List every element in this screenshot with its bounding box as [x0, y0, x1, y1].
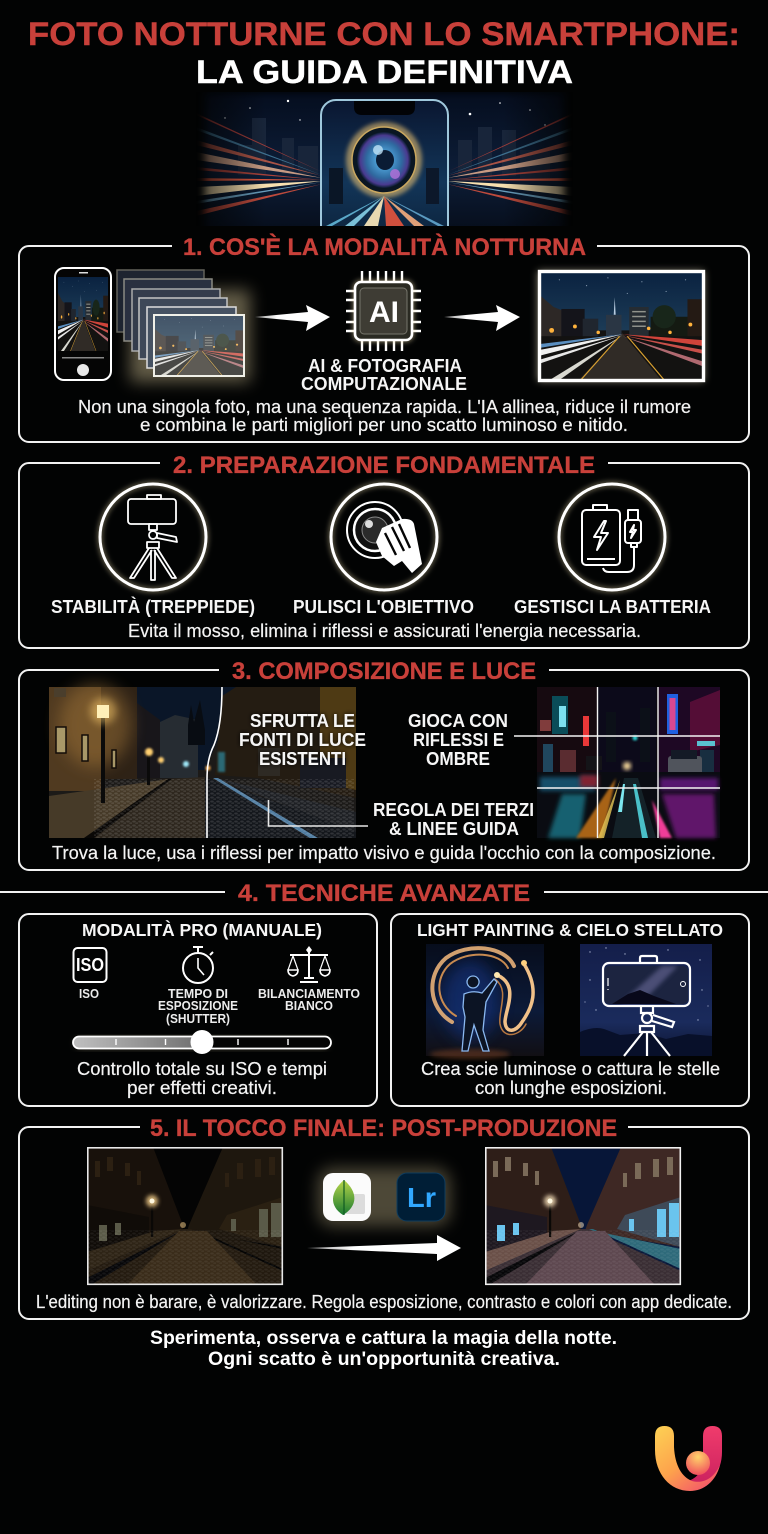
callout: sfrutta le fonti: FONTI DI LUCE [239, 730, 366, 750]
callout: sfrutta le fonti [239, 711, 366, 769]
icon: white balance scale [258, 946, 360, 1013]
title light painting: LIGHT PAINTING & CIELO STELLATO [417, 920, 723, 940]
label: AI & fotografia computazionale: COMPUTAZIONALE [301, 374, 467, 394]
icon: white balance scale: BILANCIAMENTO [258, 987, 360, 1001]
panel: 1. modalità notturna [19, 233, 749, 442]
heading 2: 2. PREPARAZIONE FONDAMENTALE [173, 452, 595, 479]
icon: stopwatch: ESPOSIZIONE [158, 999, 238, 1013]
stack of exposure frames [117, 270, 250, 382]
title: FOTO NOTTURNE CON LO SMARTPHONE: [28, 16, 740, 52]
label: AI & fotografia computazionale [301, 356, 467, 394]
icon: tripod [100, 484, 206, 590]
light trails left [196, 113, 322, 216]
panel: light painting e cielo stellato [391, 914, 749, 1106]
description 1 [78, 397, 691, 435]
icon: ISO [74, 948, 106, 1001]
photo: neon street with rule-of-thirds grid [514, 687, 720, 838]
description pro [77, 1059, 327, 1098]
labels: GESTISCI LA BATTERIA [514, 597, 711, 617]
callout: sfrutta le fonti: ESISTENTI [259, 749, 346, 769]
description 3: Trova la luce, usa i riflessi per impatto visivo e guida l'occhio con la composizione. [52, 843, 716, 863]
phone in hero [320, 99, 449, 226]
callout: gioca con riflessi: GIOCA CON [408, 711, 508, 731]
icon: Lightroom app [397, 1173, 445, 1221]
labels [51, 596, 711, 617]
split line [207, 687, 222, 838]
arrow [255, 305, 330, 331]
description 1: e combina le parti migliori per uno scatto luminoso e nitido. [140, 415, 628, 435]
final photo [538, 271, 704, 381]
label: AI & fotografia computazionale: AI & FOTOGRAFIA [308, 356, 462, 376]
description 1: Non una singola foto, ma una sequenza rapida. L'IA allinea, riduce il rumore [78, 397, 691, 417]
description 5: L'editing non è barare, è valorizzare. Regola esposizione, contrasto e colori con app dedicate. [36, 1292, 732, 1312]
right buildings [215, 687, 356, 798]
icon: stopwatch: (SHUTTER) [166, 1012, 230, 1026]
arrow [307, 1235, 461, 1261]
icon: stopwatch [158, 947, 238, 1026]
section 4 header: 4. TECNICHE AVANZATE [238, 880, 530, 907]
description light painting: con lunghe esposizioni. [475, 1078, 667, 1098]
heading 1: 1. COS'È LA MODALITÀ NOTTURNA [183, 233, 586, 261]
callout: sfrutta le fonti: SFRUTTA LE [250, 711, 355, 731]
title pro mode: MODALITÀ PRO (MANUALE) [82, 919, 322, 940]
photo: old street with lamps [49, 683, 356, 838]
labels: PULISCI L'OBIETTIVO [293, 597, 474, 617]
panel: 5. post-produzione [19, 1115, 749, 1319]
closing message: Sperimenta, osserva e cattura la magia della notte. [150, 1328, 617, 1349]
labels: STABILITÀ (TREPPIEDE) [51, 596, 255, 617]
panel: modalità pro [19, 914, 377, 1106]
arrow [444, 305, 520, 331]
image: light painting [426, 944, 544, 1059]
icon: lens cleaning [331, 484, 437, 590]
title: LA GUIDA DEFINITIVA [196, 54, 573, 90]
callout: gioca con riflessi: OMBRE [426, 749, 490, 769]
slider [73, 1030, 331, 1054]
ground [49, 777, 205, 838]
hero illustration: smartphone camera with light trails [200, 92, 570, 226]
icon: AI chip [346, 271, 421, 351]
icon: white balance scale: BIANCO [285, 999, 333, 1013]
callout: regola dei terzi: & LINEE GUIDA [389, 819, 519, 839]
panel: 2. preparazione fondamentale [19, 452, 749, 648]
image: starry sky with tripod [580, 944, 712, 1056]
icon: battery [559, 484, 665, 590]
callout: regola dei terzi [268, 800, 534, 839]
icon: Lightroom app: Lr [407, 1182, 436, 1213]
left wall [49, 687, 101, 791]
photo: before editing [87, 1147, 283, 1285]
description pro: Controllo totale su ISO e tempi [77, 1059, 327, 1079]
photo: after editing [485, 1147, 681, 1285]
panel: 3. composizione e luce [19, 658, 749, 870]
icon: Snapseed app [318, 1168, 450, 1226]
callout: regola dei terzi: REGOLA DEI TERZI [373, 800, 534, 820]
description light painting [421, 1059, 720, 1098]
logo [655, 1426, 722, 1491]
callout: gioca con riflessi: RIFLESSI E [413, 730, 504, 750]
closing message: Ogni scatto è un'opportunità creativa. [208, 1349, 560, 1370]
closing message [150, 1328, 617, 1370]
description 2: Evita il mosso, elimina i riflessi e assicurati l'energia necessaria. [128, 621, 641, 641]
icon: stopwatch: TEMPO DI [168, 987, 228, 1001]
lamps [101, 716, 105, 803]
icon: ISO: ISO [79, 987, 99, 1001]
wet road [537, 772, 720, 838]
light trails right [447, 113, 573, 216]
heading 3: 3. COMPOSIZIONE E LUCE [232, 658, 536, 685]
icon: AI chip: AI [369, 296, 399, 329]
description light painting: Crea scie luminose o cattura le stelle [421, 1059, 720, 1079]
heading 5: 5. IL TOCCO FINALE: POST-PRODUZIONE [150, 1115, 617, 1142]
phone capturing scene [55, 268, 111, 380]
icon: ISO: ISO [76, 955, 104, 975]
rule of thirds grid [514, 687, 720, 838]
title [28, 16, 740, 90]
callout: gioca con riflessi [408, 711, 508, 769]
description pro: per effetti creativi. [127, 1078, 277, 1098]
